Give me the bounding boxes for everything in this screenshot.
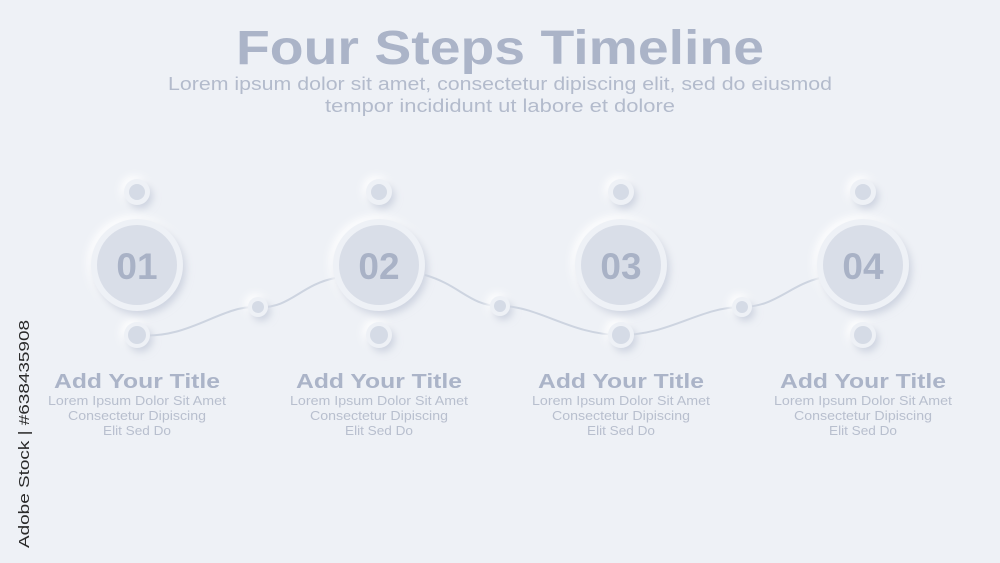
subtitle bbox=[168, 74, 832, 116]
step 1: Add Your Title bbox=[54, 371, 220, 393]
watermark id: Adobe Stock | #638435908 bbox=[16, 320, 33, 548]
step 1 bbox=[48, 179, 226, 438]
step 4: Elit Sed Do bbox=[829, 423, 897, 438]
step 2: Lorem Ipsum Dolor Sit Amet bbox=[290, 393, 468, 408]
step 2: Consectetur Dipiscing bbox=[310, 408, 448, 423]
step 2: 02 bbox=[358, 246, 400, 287]
subtitle: tempor incididunt ut labore et dolore bbox=[325, 96, 675, 116]
step 1: Lorem Ipsum Dolor Sit Amet bbox=[48, 393, 226, 408]
step 4: 04 bbox=[842, 246, 884, 287]
timeline connector line bbox=[137, 275, 820, 335]
step 4 bbox=[774, 179, 952, 438]
step 2 bbox=[290, 179, 468, 438]
mid dots bbox=[248, 296, 752, 317]
step 4: Lorem Ipsum Dolor Sit Amet bbox=[774, 393, 952, 408]
step 2: Elit Sed Do bbox=[345, 423, 413, 438]
step 1: Elit Sed Do bbox=[103, 423, 171, 438]
step 4: Add Your Title bbox=[780, 371, 946, 393]
step 3: 03 bbox=[600, 246, 642, 287]
step 3: Add Your Title bbox=[538, 371, 704, 393]
step 3 bbox=[532, 179, 710, 438]
step 3: Lorem Ipsum Dolor Sit Amet bbox=[532, 393, 710, 408]
step 3: Elit Sed Do bbox=[587, 423, 655, 438]
step 3: Consectetur Dipiscing bbox=[552, 408, 690, 423]
title: Four Steps Timeline bbox=[236, 22, 764, 75]
step 1: 01 bbox=[116, 246, 158, 287]
step 4: Consectetur Dipiscing bbox=[794, 408, 932, 423]
subtitle: Lorem ipsum dolor sit amet, consectetur dipiscing elit, sed do eiusmod bbox=[168, 74, 832, 94]
step 2: Add Your Title bbox=[296, 371, 462, 393]
step 1: Consectetur Dipiscing bbox=[68, 408, 206, 423]
